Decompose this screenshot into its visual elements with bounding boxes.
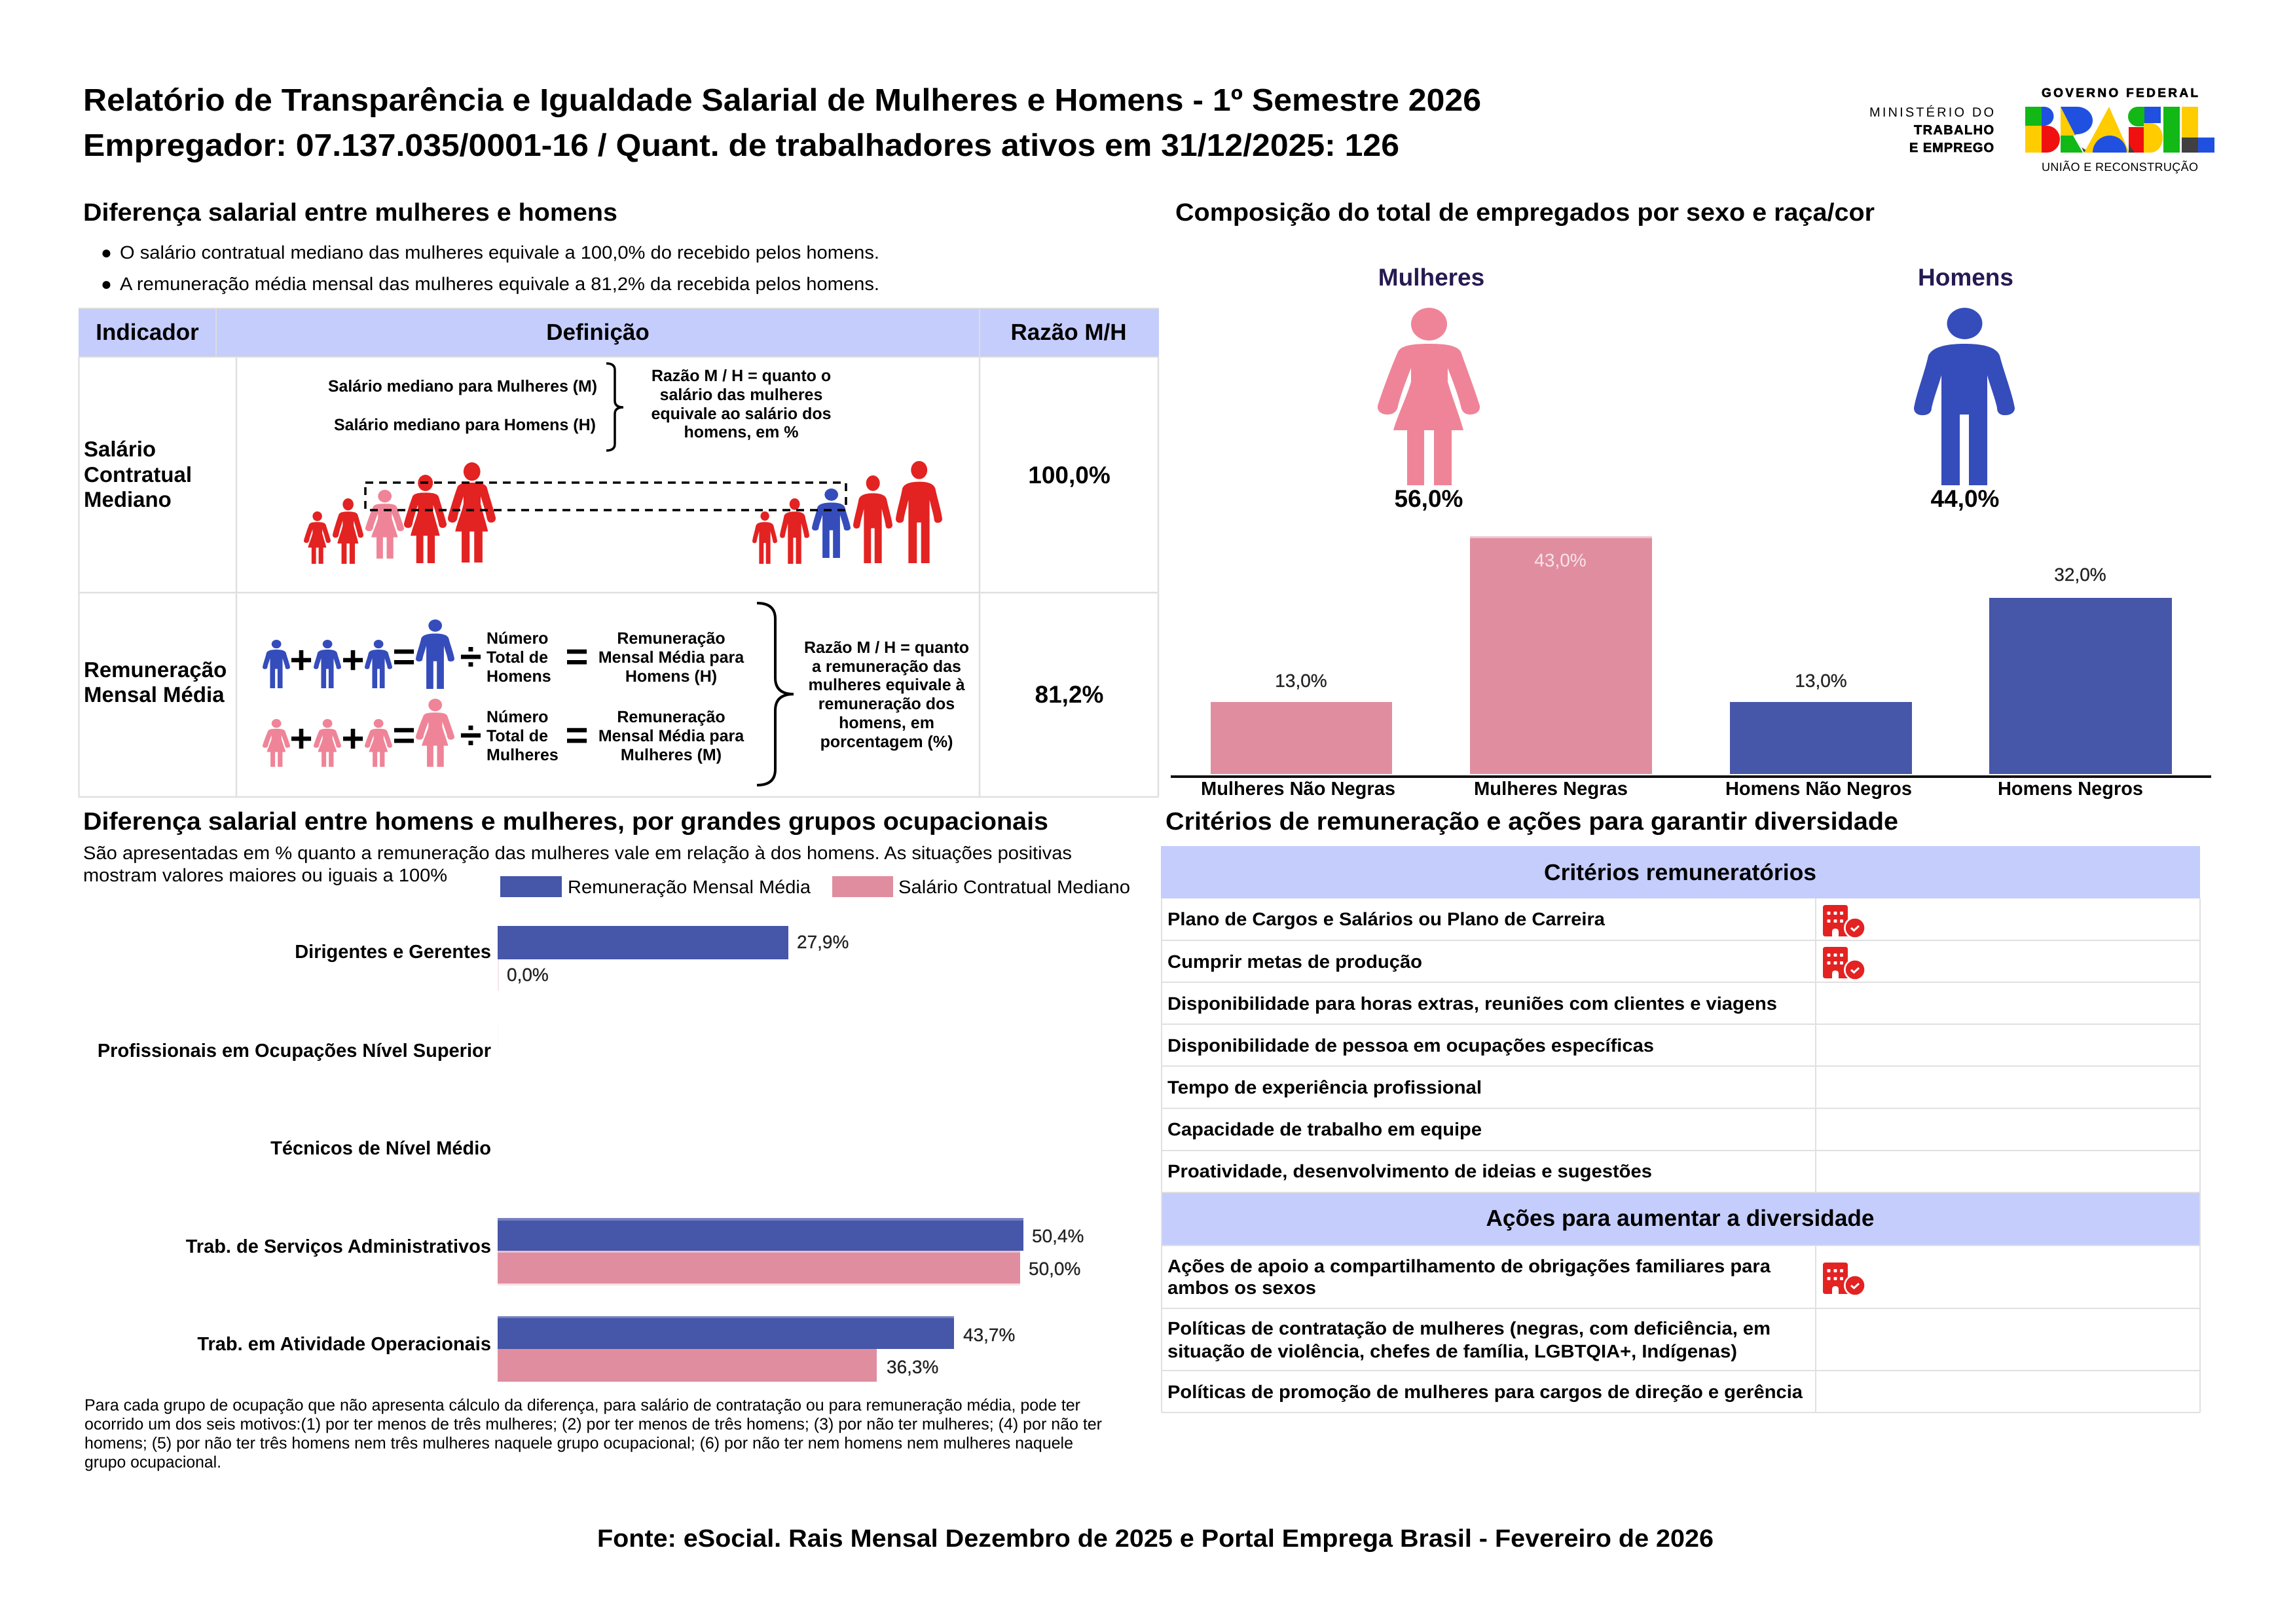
group: serviços administrativos: [186, 1218, 1084, 1285]
group: dirigentes e gerentes: Dirigentes e Gerentes: [295, 942, 491, 963]
formula homens: =: [565, 635, 589, 678]
table header: Razão M/H: [1011, 320, 1126, 345]
formula mulheres: +: [289, 716, 313, 760]
razão explanation 2: mulheres equivale à: [808, 676, 965, 694]
legend: [500, 876, 1130, 897]
formula mulheres: ÷: [460, 713, 481, 757]
row label: salário contratual mediano: Mediano: [84, 487, 172, 511]
bar chart: raça/cor: Homens Negros: [1998, 779, 2143, 800]
razão explanation 2: [804, 638, 969, 751]
bar chart: raça/cor: Homens Não Negros: [1725, 779, 1912, 800]
group: atividade operacionais: 43,7%: [963, 1325, 1015, 1345]
bar chart: grupos ocupacionais: [98, 926, 1084, 1382]
formula homens: +: [341, 638, 365, 682]
formula homens: [263, 619, 744, 689]
panel: homens: 44,0%: [1931, 485, 1999, 512]
bar chart: raça/cor: Mulheres Não Negras: [1201, 779, 1395, 800]
formula mulheres: Número: [487, 708, 548, 726]
heading: diferença salarial: Diferença salarial entre mulheres e homens: [83, 199, 617, 227]
salário mediano definition text: Salário mediano para Mulheres (M): [328, 377, 597, 396]
header: critérios remuneratórios: [1161, 846, 2200, 898]
razão explanation: Razão M / H = quanto o: [652, 367, 831, 385]
logo: ministério do trabalho e emprego: MINISTÉRIO DO: [1869, 105, 1994, 120]
formula homens: =: [392, 635, 416, 678]
formula homens: Homens (H): [625, 667, 717, 686]
value: 81,2%: 81,2%: [1035, 681, 1103, 708]
action rows: ambos os sexos: [1167, 1278, 1316, 1298]
title line 2: Empregador: 07.137.035/0001-16 / Quant. de trabalhadores ativos em 31/12/2025: 126: [83, 128, 1399, 163]
table header: Definição: [546, 320, 650, 345]
group: atividade operacionais: [197, 1316, 1015, 1382]
table header: Indicador: [96, 320, 199, 345]
header: ações para aumentar: Ações para aumentar a diversidade: [1486, 1206, 1874, 1231]
bullet text block: O salário contratual mediano das mulheres equivale a 100,0% do recebido pelos homens.: [120, 242, 879, 263]
panel: homens: [1914, 264, 2015, 512]
salário mediano definition text: Salário mediano para Homens (H): [334, 416, 596, 434]
heading: critérios: Critérios de remuneração e ações para garantir diversidade: [1166, 808, 1898, 836]
formula mulheres: +: [341, 716, 365, 760]
formula homens: +: [289, 638, 313, 682]
razão explanation: salário das mulheres: [660, 386, 822, 404]
logo: governo federal brasil: UNIÃO E RECONSTRUÇÃO: [2042, 160, 2198, 174]
large brace: [757, 603, 794, 785]
group: dirigentes e gerentes: 0,0%: [507, 965, 549, 985]
title line 1: Relatório de Transparência e Igualdade Salarial de Mulheres e Homens - 1º Semestre 2026: [83, 83, 1481, 118]
criteria rows: Tempo de experiência profissional: [1167, 1077, 1482, 1098]
formula homens: Mensal Média para: [598, 648, 744, 667]
criteria rows: [1167, 909, 1777, 1181]
header: ações para aumentar: [1161, 1193, 2200, 1246]
brace: [606, 363, 623, 451]
bullet text block: [101, 242, 879, 294]
bullet text block: A remuneração média mensal das mulheres equivale a 81,2% da recebida pelos homens.: [120, 274, 879, 294]
bar chart: raça/cor: 13,0%: [1795, 671, 1847, 691]
salário mediano definition text: [328, 377, 597, 434]
criteria rows: Capacidade de trabalho em equipe: [1167, 1119, 1482, 1139]
header: critérios remuneratórios: Critérios remuneratórios: [1544, 860, 1816, 885]
table header: [79, 308, 1159, 357]
legend: Remuneração Mensal Média: [568, 877, 811, 897]
heading: grupos ocupacionais: Diferença salarial entre homens e mulheres, por grandes grupos ocupacionais: [83, 808, 1048, 836]
razão explanation 2: remuneração dos: [818, 695, 955, 713]
logo: ministério do trabalho e emprego: TRABALHO: [1914, 123, 1994, 138]
formula homens: Remuneração: [617, 629, 725, 648]
legend: Salário Contratual Mediano: [898, 877, 1130, 897]
logo: governo federal brasil: [2025, 86, 2214, 174]
formula mulheres: Mulheres: [487, 746, 559, 764]
formula mulheres: Remuneração: [617, 708, 725, 726]
group: atividade operacionais: 36,3%: [887, 1357, 938, 1377]
formula homens: Total de: [487, 648, 548, 667]
text block: explicação: São apresentadas em % quanto a remuneração das mulheres vale em relação à dos homens. As situações positivas: [83, 843, 1072, 863]
criteria rows: Proatividade, desenvolvimento de ideias e sugestões: [1167, 1161, 1652, 1181]
formula mulheres: Mensal Média para: [598, 727, 744, 745]
group: dirigentes e gerentes: [295, 926, 849, 985]
logo: ministério do trabalho e emprego: [1869, 105, 1994, 155]
panel: tabela indicador definição razão: [79, 308, 1159, 797]
razão explanation: equivale ao salário dos: [651, 405, 832, 423]
men median figures: [752, 461, 942, 564]
formula mulheres: Mulheres (M): [621, 746, 722, 764]
row label: salário contratual mediano: [84, 437, 192, 511]
value: 100,0%: 100,0%: [1028, 462, 1111, 489]
formula mulheres: Total de: [487, 727, 548, 745]
formula mulheres: [263, 699, 744, 767]
panel: homens: Homens: [1918, 264, 2013, 291]
formula mulheres: =: [565, 713, 589, 757]
action rows: Ações de apoio a compartilhamento de obrigações familiares para: [1167, 1256, 1771, 1276]
bar chart: raça/cor: Mulheres Negras: [1474, 779, 1628, 800]
razão explanation 2: a remuneração das: [812, 657, 961, 676]
group: serviços administrativos: 50,0%: [1029, 1259, 1080, 1279]
criteria rows: Plano de Cargos e Salários ou Plano de Carreira: [1167, 909, 1605, 929]
razão explanation 2: homens, em: [839, 714, 934, 732]
row label: remuneração mensal média: Mensal Média: [84, 682, 225, 707]
action rows: situação de violência, chefes de família, LGBTQIA+, Indígenas): [1167, 1341, 1737, 1361]
row label: remuneração mensal média: Remuneração: [84, 657, 227, 682]
logo: ministério do trabalho e emprego: E EMPREGO: [1909, 141, 1994, 155]
panel: mulheres: 56,0%: [1395, 485, 1463, 512]
formula homens: Número: [487, 629, 548, 648]
panel: mulheres: [1378, 264, 1484, 512]
text block: explicação: [83, 843, 1072, 885]
heading: composição: Composição do total de empregados por sexo e raça/cor: [1175, 199, 1875, 227]
formula mulheres: =: [392, 713, 416, 757]
action rows: Políticas de contratação de mulheres (negras, com deficiência, em: [1167, 1318, 1771, 1338]
icon: building check 1: [1823, 905, 1866, 939]
group: serviços administrativos: Trab. de Serviços Administrativos: [186, 1236, 491, 1257]
razão explanation 2: porcentagem (%): [820, 733, 953, 751]
icon: building check 3: [1823, 1263, 1866, 1297]
bar chart: raça/cor: 43,0%: [1534, 550, 1587, 570]
row label: salário contratual mediano: Contratual: [84, 462, 192, 487]
action rows: Políticas de promoção de mulheres para cargos de direção e gerência: [1167, 1382, 1803, 1402]
footer source: Fonte: eSocial. Rais Mensal Dezembro de 2025 e Portal Emprega Brasil - Fevereiro de 2026: [597, 1525, 1714, 1553]
group: técnicos: Técnicos de Nível Médio: [270, 1138, 491, 1159]
row label: remuneração mensal média: [84, 657, 227, 707]
formula homens: Homens: [487, 667, 551, 686]
panel: mulheres: Mulheres: [1378, 264, 1484, 291]
row label: salário contratual mediano: Salário: [84, 437, 156, 461]
bullet text block: ●: [101, 242, 112, 263]
criteria rows: Disponibilidade para horas extras, reuniões com clientes e viagens: [1167, 993, 1777, 1014]
footnote: grupo ocupacional.: [84, 1453, 221, 1471]
bar chart: raça/cor: 32,0%: [2054, 564, 2106, 585]
bar chart: raça/cor: [1171, 536, 2211, 800]
footnote: Para cada grupo de ocupação que não apresenta cálculo da diferença, para salário de contratação ou para remuneração média, pode ter: [84, 1396, 1080, 1414]
group: atividade operacionais: Trab. em Atividade Operacionais: [197, 1334, 491, 1355]
footnote: ocorrido um dos seis motivos:(1) por ter menos de três mulheres; (2) por ter menos de três homens; (3) por não ter mulheres; (4) por não ter: [84, 1415, 1102, 1433]
panel: critérios table: [1161, 846, 2200, 1412]
group: serviços administrativos: 50,4%: [1032, 1226, 1084, 1246]
dashed median box: [365, 483, 846, 510]
razão explanation: homens, em %: [684, 423, 799, 441]
women median figures: [304, 462, 496, 564]
group: profissionais nível superior: Profissionais em Ocupações Nível Superior: [98, 1041, 491, 1061]
bar chart: raça/cor: 13,0%: [1275, 671, 1327, 691]
icon: building check 2: [1823, 947, 1866, 981]
title: [83, 83, 1481, 163]
formula homens: ÷: [460, 635, 481, 678]
razão explanation: [651, 367, 832, 441]
logo: governo federal brasil: GOVERNO FEDERAL: [2042, 86, 2198, 100]
criteria rows: Disponibilidade de pessoa em ocupações específicas: [1167, 1035, 1654, 1056]
action rows: [1167, 1256, 1803, 1402]
footnote: [84, 1396, 1102, 1471]
text block: explicação: mostram valores maiores ou iguais a 100%: [83, 865, 447, 885]
razão explanation 2: Razão M / H = quanto: [804, 638, 969, 657]
group: dirigentes e gerentes: 27,9%: [797, 932, 849, 952]
criteria rows: Cumprir metas de produção: [1167, 951, 1422, 972]
bullet text block: ●: [101, 274, 112, 294]
footnote: homens; (5) por não ter três homens nem três mulheres naquele grupo ocupacional; (6) por não ter nem homens nem mulheres naquele: [84, 1434, 1073, 1452]
